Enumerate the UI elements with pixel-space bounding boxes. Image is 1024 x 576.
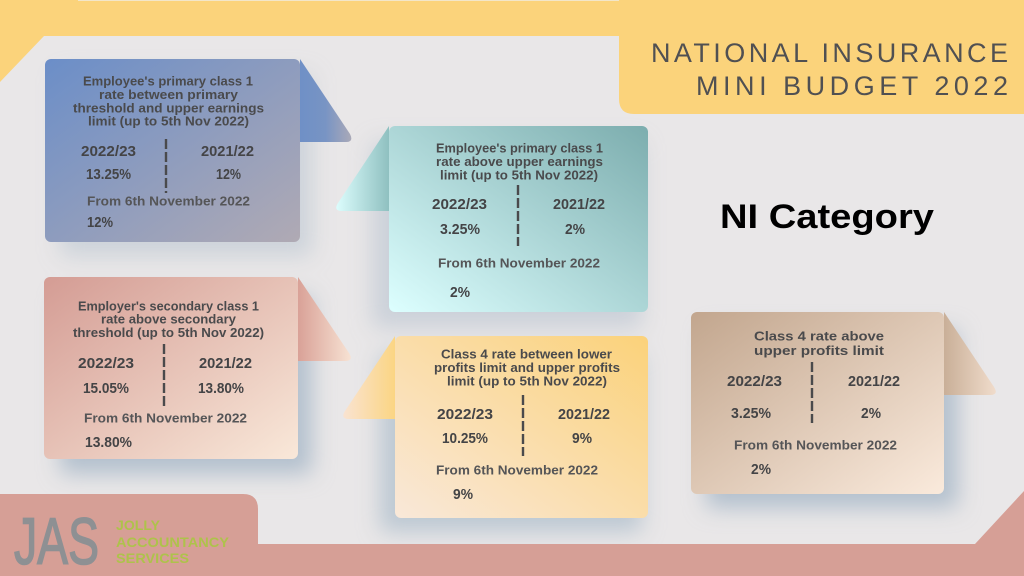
card background [44, 277, 298, 459]
2022/23 column: 10.25% [442, 431, 488, 447]
from 6th November rate [436, 462, 598, 503]
2021/22 column: 12% [216, 167, 241, 183]
2021/22 column: 2021/22 [558, 407, 610, 423]
from 6th November rate: From 6th November 2022 [84, 410, 247, 426]
from 6th November rate: 9% [453, 487, 473, 503]
card heading: Employee's primary class 1 [83, 74, 253, 88]
title panel [619, 0, 1024, 114]
logo wordmark: JOLLY [116, 518, 160, 533]
logo mark: JAS [14, 504, 99, 576]
panel: employer secondary class 1 [44, 277, 351, 459]
panel: employee primary class 1 between thresholds [45, 59, 351, 242]
2021/22 column [848, 374, 900, 422]
from 6th November rate: 12% [87, 215, 113, 231]
from 6th November rate: 13.80% [85, 435, 132, 451]
column divider [163, 344, 165, 406]
from 6th November rate [734, 438, 897, 478]
2021/22 column: 2% [861, 406, 881, 422]
column divider [811, 362, 813, 423]
top yellow banner [0, 0, 620, 82]
card heading: rate above secondary [101, 312, 237, 326]
card heading [73, 74, 264, 128]
card background [395, 336, 648, 518]
card heading: threshold and upper earnings [73, 100, 264, 116]
2021/22 column: 2021/22 [848, 374, 900, 390]
card heading [434, 346, 620, 388]
card background [389, 126, 648, 312]
logo wordmark [116, 518, 229, 566]
heading: NI Category: NI Category [720, 198, 934, 236]
2021/22 column: 2021/22 [553, 197, 605, 213]
fold tab [336, 126, 389, 211]
logo wordmark: ACCOUNTANCY [116, 535, 229, 550]
2022/23 column: 2022/23 [727, 374, 782, 390]
card heading: limit (up to 5th Nov 2022) [447, 374, 607, 388]
card heading: limit (up to 5th Nov 2022) [88, 114, 249, 128]
2022/23 column [437, 407, 493, 447]
card heading [754, 328, 885, 358]
2021/22 column [558, 407, 610, 447]
2021/22 column [553, 197, 605, 238]
card heading [436, 140, 603, 182]
2022/23 column [78, 356, 134, 397]
from 6th November rate: From 6th November 2022 [438, 256, 600, 270]
2022/23 column: 13.25% [86, 167, 131, 183]
card background [45, 59, 300, 242]
2022/23 column [432, 197, 487, 238]
title line 1: NATIONAL INSURANCE [651, 38, 1008, 68]
card heading: upper profits limit [754, 343, 885, 358]
2022/23 column [81, 144, 136, 183]
2021/22 column: 13.80% [198, 381, 244, 397]
2022/23 column: 2022/23 [437, 407, 493, 423]
card heading: limit (up to 5th Nov 2022) [440, 168, 598, 182]
from 6th November rate: 2% [450, 285, 470, 301]
2022/23 column [727, 374, 782, 422]
column divider [517, 185, 519, 246]
card heading: rate between primary [99, 87, 239, 102]
card heading: profits limit and upper profits [434, 360, 620, 375]
column divider [522, 395, 524, 456]
2022/23 column: 2022/23 [81, 144, 136, 160]
panel: employee primary class 1 above upper limit [336, 126, 648, 312]
2021/22 column [198, 356, 252, 397]
logo: Jolly Accountancy Services [14, 504, 229, 576]
2022/23 column: 3.25% [731, 406, 771, 422]
from 6th November rate: From 6th November 2022 [87, 194, 250, 208]
fold tab [300, 59, 351, 142]
card heading: Employer's secondary class 1 [78, 298, 259, 314]
card heading [73, 298, 264, 340]
card heading: threshold (up to 5th Nov 2022) [73, 325, 264, 340]
card heading: Class 4 rate above [754, 328, 884, 344]
column divider [165, 139, 167, 193]
2021/22 column: 9% [572, 431, 592, 447]
card background [691, 312, 944, 494]
panel: class 4 between limits [343, 336, 648, 518]
2022/23 column: 15.05% [83, 381, 129, 397]
2021/22 column: 2021/22 [201, 144, 254, 160]
bottom pink banner [0, 491, 1024, 576]
from 6th November rate: 2% [751, 462, 771, 478]
2022/23 column: 2022/23 [432, 197, 487, 213]
from 6th November rate [438, 256, 600, 301]
card heading: Employee's primary class 1 [436, 140, 603, 156]
2021/22 column: 2021/22 [199, 356, 252, 372]
card heading: rate above upper earnings [436, 154, 603, 169]
2021/22 column [201, 144, 254, 183]
2021/22 column: 2% [565, 222, 585, 238]
from 6th November rate [87, 194, 250, 231]
2022/23 column: 2022/23 [78, 356, 134, 372]
title line 2: MINI BUDGET 2022 [696, 71, 1008, 101]
from 6th November rate: From 6th November 2022 [734, 438, 897, 452]
fold tab [944, 312, 996, 395]
from 6th November rate [84, 410, 247, 451]
card heading: Class 4 rate between lower [441, 346, 612, 362]
logo wordmark: SERVICES [116, 551, 189, 566]
fold tab [343, 336, 395, 419]
panel: class 4 above upper limit [691, 312, 996, 494]
2022/23 column: 3.25% [440, 222, 480, 238]
from 6th November rate: From 6th November 2022 [436, 462, 598, 478]
fold tab [298, 277, 351, 361]
